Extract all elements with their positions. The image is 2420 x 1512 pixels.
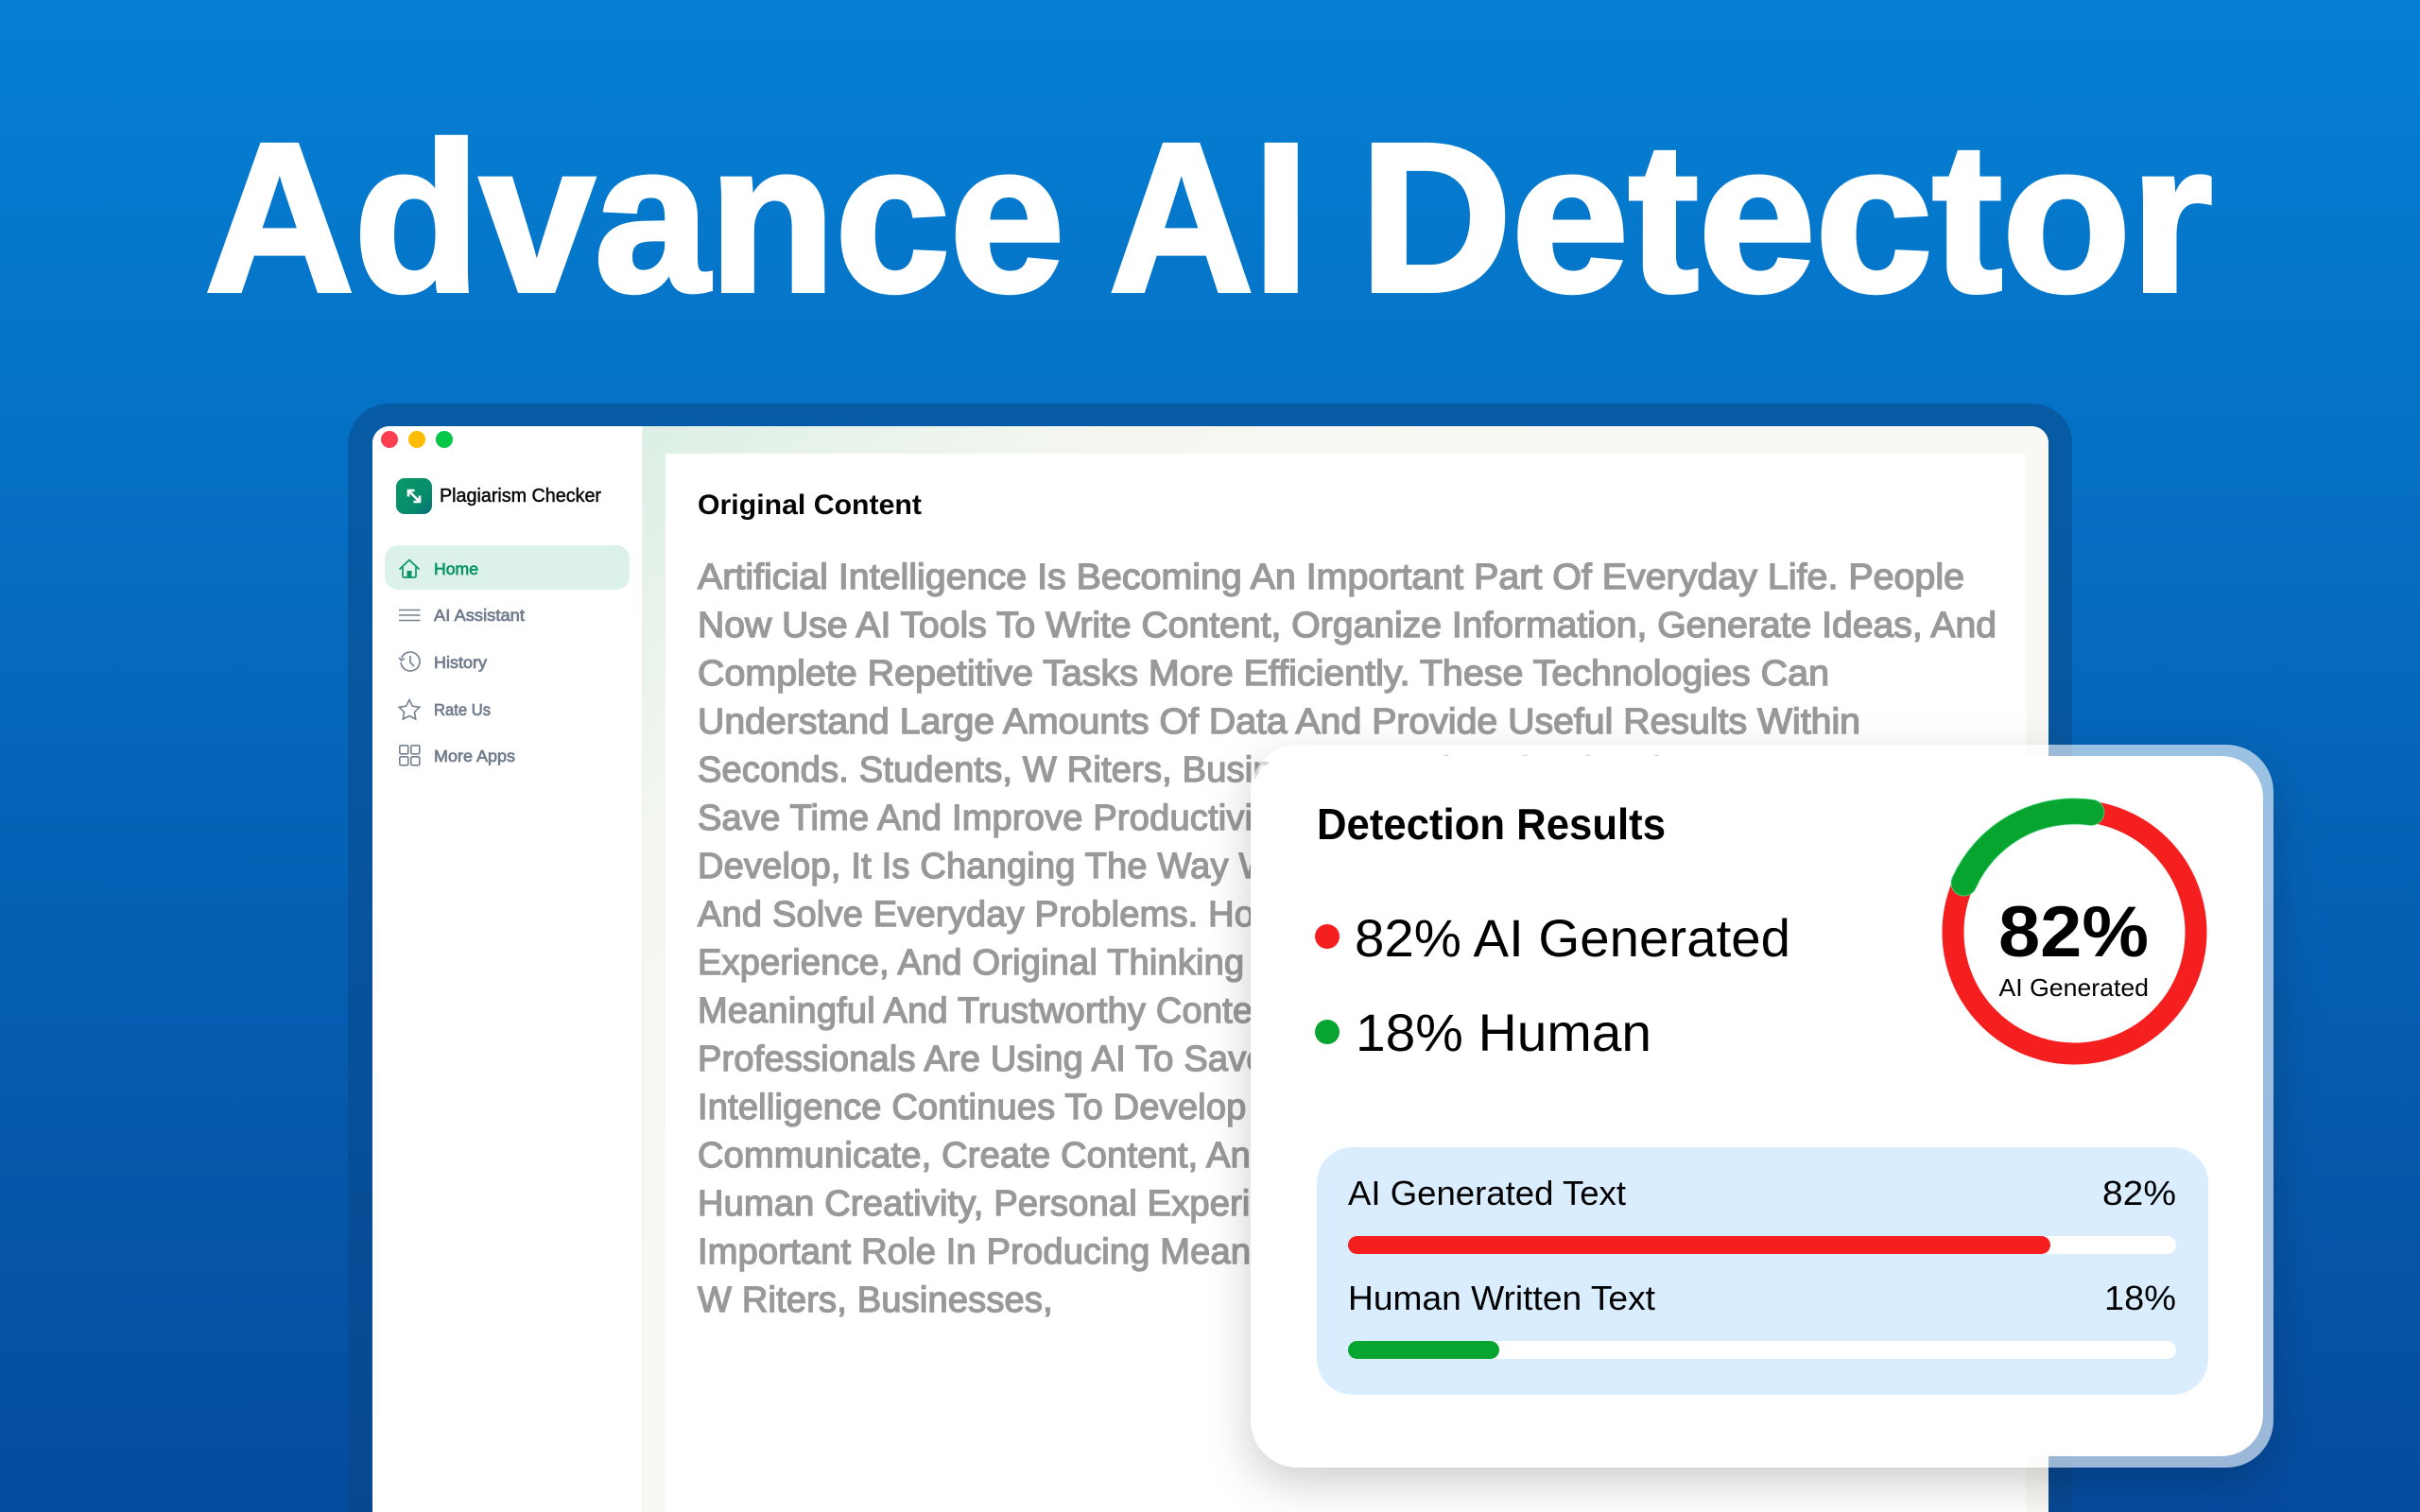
title	[205, 100, 2212, 336]
body text: And Solve Everyday Problems. However, Human Creativity, Personal	[698, 895, 1809, 935]
row: human written text	[1348, 1279, 2176, 1359]
nav item: More Apps	[400, 746, 515, 765]
donut chart: 82%	[1998, 892, 2149, 972]
row: AI generated text: AI Generated Text	[1348, 1174, 1626, 1212]
nav item: home (active): Home	[434, 559, 478, 578]
nav item: home (active)	[385, 545, 630, 590]
body text: Save Time And Improve Productivity. As These Systems Continue To	[698, 799, 1802, 838]
body text: Communicate, Create Content, And Solve Problems. However,	[698, 1136, 1706, 1176]
nav item: AI Assistant: AI Assistant	[434, 606, 525, 625]
card surface	[1251, 756, 2263, 1456]
title: Advance	[205, 100, 1064, 336]
nav item: Rate Us	[399, 699, 491, 719]
body text: W Riters, Businesses,	[698, 1280, 1053, 1320]
breakdown panel	[1317, 1147, 2208, 1395]
body text: Meaningful And Trustworthy Content. Students, Writers, And	[698, 991, 1665, 1031]
body text: Develop, It Is Changing The Way We Work, Learn, Communicate,	[698, 847, 1754, 886]
row: AI generated text: 82%	[2102, 1174, 2176, 1212]
body text: Seconds. Students, W Riters, Businesses, And Professionals Are	[698, 750, 1743, 790]
nav item: History: History	[434, 653, 487, 672]
panel: original content	[666, 454, 2026, 1512]
app window	[372, 426, 2048, 1512]
heading: original content: Original Content	[698, 490, 922, 521]
title: AI	[1110, 100, 1308, 336]
donut chart: AI Generated	[1998, 973, 2149, 1002]
body text: Professionals Are Using AI To Save Time. As Artificial	[698, 1040, 1552, 1079]
body text	[698, 558, 1996, 1320]
app window bezel	[348, 404, 2072, 1512]
app name: Plagiarism Checker	[440, 486, 601, 507]
row: human written text: Human Written Text	[1348, 1279, 1655, 1317]
row: human written text: 18%	[2104, 1279, 2176, 1317]
nav item: More Apps: More Apps	[434, 747, 515, 765]
body text: Artificial Intelligence Is Becoming An Important Part Of Everyday Life. People	[698, 558, 1964, 597]
title: Detector	[1359, 100, 2212, 336]
sidebar	[372, 426, 643, 1512]
row: AI generated text	[1348, 1174, 2176, 1254]
body text: Complete Repetitive Tasks More Efficiently. These Technologies Can	[698, 654, 1829, 694]
body text: Human Creativity, Personal Experience, And Original Thinking Play An	[698, 1184, 1827, 1224]
body text: Experience, And Original Thinking Remain Important In Producing	[698, 943, 1757, 983]
donut chart	[1953, 811, 2196, 1054]
body text: Intelligence Continues To Develop It Is Changing How People	[698, 1088, 1686, 1127]
detection results card	[1251, 745, 2273, 1482]
app logo	[396, 478, 432, 514]
body text: Important Role In Producing Meaningful Content. Students,	[698, 1232, 1649, 1272]
nav item: Rate Us: Rate Us	[434, 700, 491, 719]
card heading: Detection Results	[1317, 799, 1666, 849]
content background	[643, 426, 2048, 1512]
nav item: AI Assistant	[399, 609, 526, 622]
body text: Understand Large Amounts Of Data And Provide Useful Results Within	[698, 702, 1860, 742]
window control buttons	[381, 431, 453, 448]
nav item: History	[399, 652, 487, 672]
body text: Now Use AI Tools To Write Content, Organize Information, Generate Ideas, And	[698, 606, 1996, 645]
legend: human: 18% Human	[1356, 1003, 1651, 1062]
card border	[1251, 745, 2273, 1468]
legend: AI generated: 82% AI Generated	[1355, 908, 1790, 968]
